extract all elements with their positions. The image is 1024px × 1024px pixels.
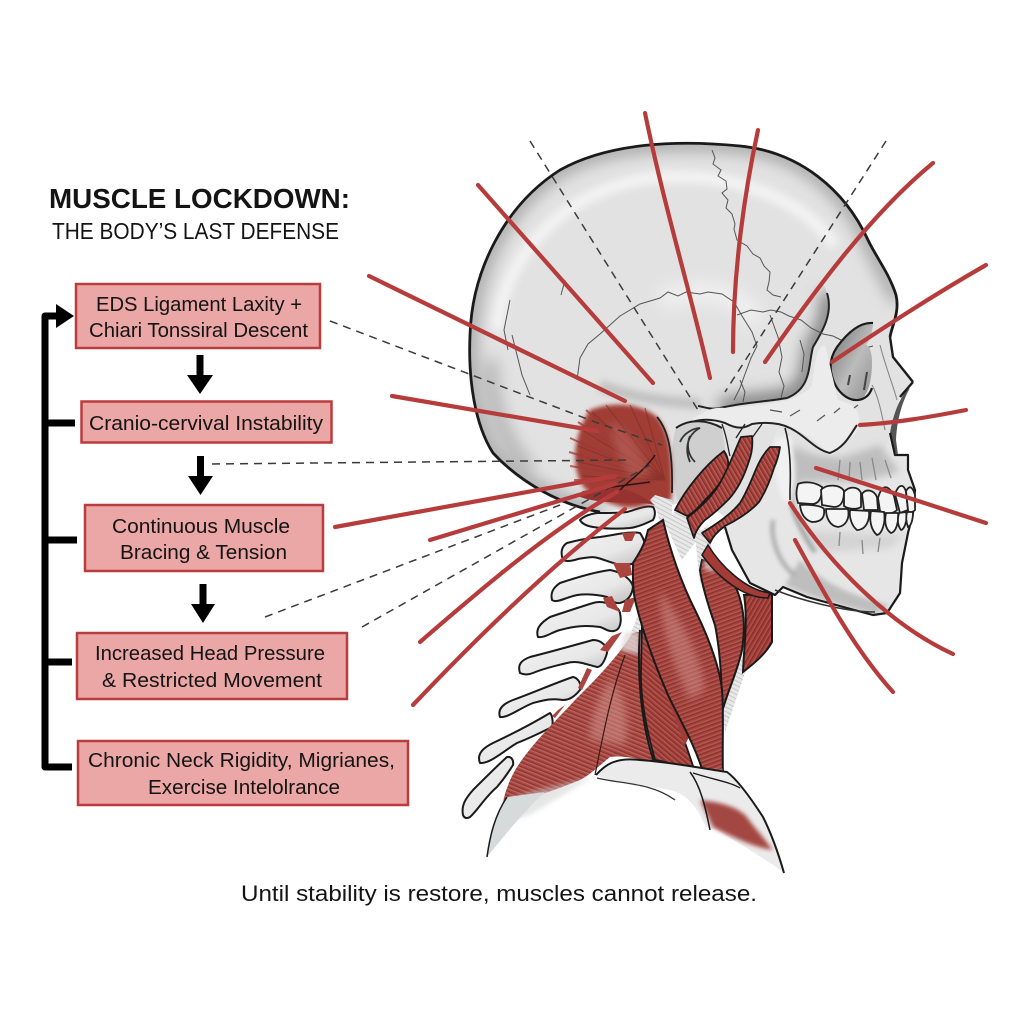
teeth bbox=[796, 482, 915, 535]
temporal line bbox=[698, 293, 829, 409]
jaw and maxilla bbox=[725, 337, 915, 615]
box: increased head pressure: & Restricted Movement bbox=[102, 670, 322, 692]
box: EDS ligament laxity bbox=[76, 284, 320, 348]
muscle: far right strap bbox=[743, 594, 772, 672]
box: cranio-cervival instability bbox=[82, 402, 332, 442]
nasal aperture bbox=[890, 388, 910, 455]
zygomatic arch bbox=[680, 345, 859, 455]
box: chronic neck rigidity: Exercise Intelolrance bbox=[148, 777, 340, 799]
arrow 2 bbox=[188, 456, 213, 495]
sutures bbox=[504, 150, 873, 402]
orbit bbox=[831, 323, 897, 430]
box: EDS ligament laxity: EDS Ligament Laxity + bbox=[96, 294, 302, 316]
box: cranio-cervival instability: Cranio-cervival Instability bbox=[89, 413, 323, 435]
muscle: digastric slip bbox=[702, 545, 770, 598]
cranium bbox=[468, 142, 912, 516]
box: chronic neck rigidity bbox=[78, 741, 408, 805]
tendons bbox=[630, 490, 747, 732]
box: EDS ligament laxity: Chiari Tonssiral Descent bbox=[89, 320, 308, 342]
cranium outline bbox=[470, 143, 897, 512]
small deep muscle between vertebrae bbox=[552, 532, 636, 718]
ear canal hollow bbox=[672, 421, 762, 500]
dashed leader lines bbox=[212, 141, 886, 627]
title: MUSCLE LOCKDOWN: bbox=[49, 183, 350, 214]
muscle: trapezius bbox=[495, 630, 654, 825]
arrow 3 bbox=[191, 584, 215, 623]
muscle: levator scapulae bbox=[641, 625, 695, 772]
box: chronic neck rigidity: Chronic Neck Rigidity, Migrianes, bbox=[88, 750, 395, 772]
cervical vertebrae bbox=[463, 507, 655, 818]
muscle: deep strip bbox=[657, 663, 690, 745]
shoulder bbox=[487, 759, 784, 873]
red pointer lines bbox=[335, 113, 986, 705]
box: continuous muscle bracing: Continuous Muscle bbox=[112, 516, 290, 538]
box: continuous muscle bracing bbox=[85, 505, 323, 571]
muscle: sternocleidomastoid bbox=[633, 520, 723, 775]
muscle: upper straps from mastoid bbox=[675, 436, 780, 543]
caption: Until stability is restore, muscles cannot release. bbox=[241, 881, 757, 906]
muscle: middle scalene bbox=[700, 552, 744, 712]
anatomical illustration: skull and neck bbox=[463, 143, 915, 873]
arrow 1 bbox=[187, 355, 213, 394]
box: increased head pressure bbox=[77, 633, 347, 699]
temporal fossa shading bbox=[720, 293, 829, 408]
muscle: occipital fan bbox=[569, 405, 672, 530]
box: increased head pressure: Increased Head Pressure bbox=[95, 643, 325, 665]
subtitle: THE BODY’S LAST DEFENSE bbox=[52, 218, 339, 244]
box: continuous muscle bracing: Bracing & Tension bbox=[120, 542, 287, 564]
flowchart feedback bracket bbox=[45, 304, 77, 767]
